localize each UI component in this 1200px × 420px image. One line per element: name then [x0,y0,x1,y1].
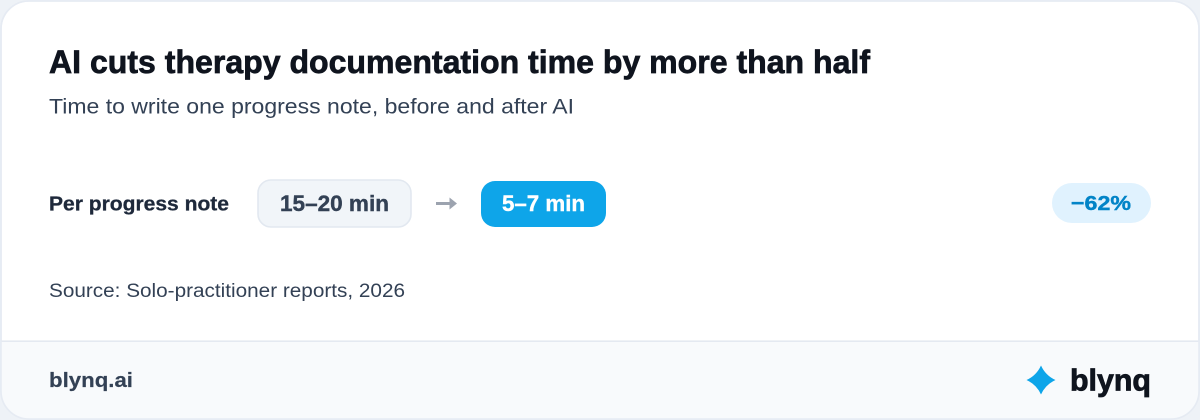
subtitle: Time to write one progress note, before and after AI [49,96,574,118]
after value pill [481,181,606,227]
change badge: −62% [1071,192,1131,215]
source note: Source: Solo-practitioner reports, 2026 [49,281,405,302]
before value pill [258,180,411,227]
row label: Per progress note [49,192,229,216]
brand wordmark: blynq [1070,364,1151,398]
arrow [436,198,457,210]
after value pill: 5–7 min [502,191,585,216]
icon: sparkle logo [1026,366,1056,394]
title: AI cuts therapy documentation time by more than half [49,44,870,80]
footer [2,340,1198,398]
before value pill: 15–20 min [280,191,389,216]
change badge [1052,183,1151,223]
footer url: blynq.ai [49,369,133,392]
